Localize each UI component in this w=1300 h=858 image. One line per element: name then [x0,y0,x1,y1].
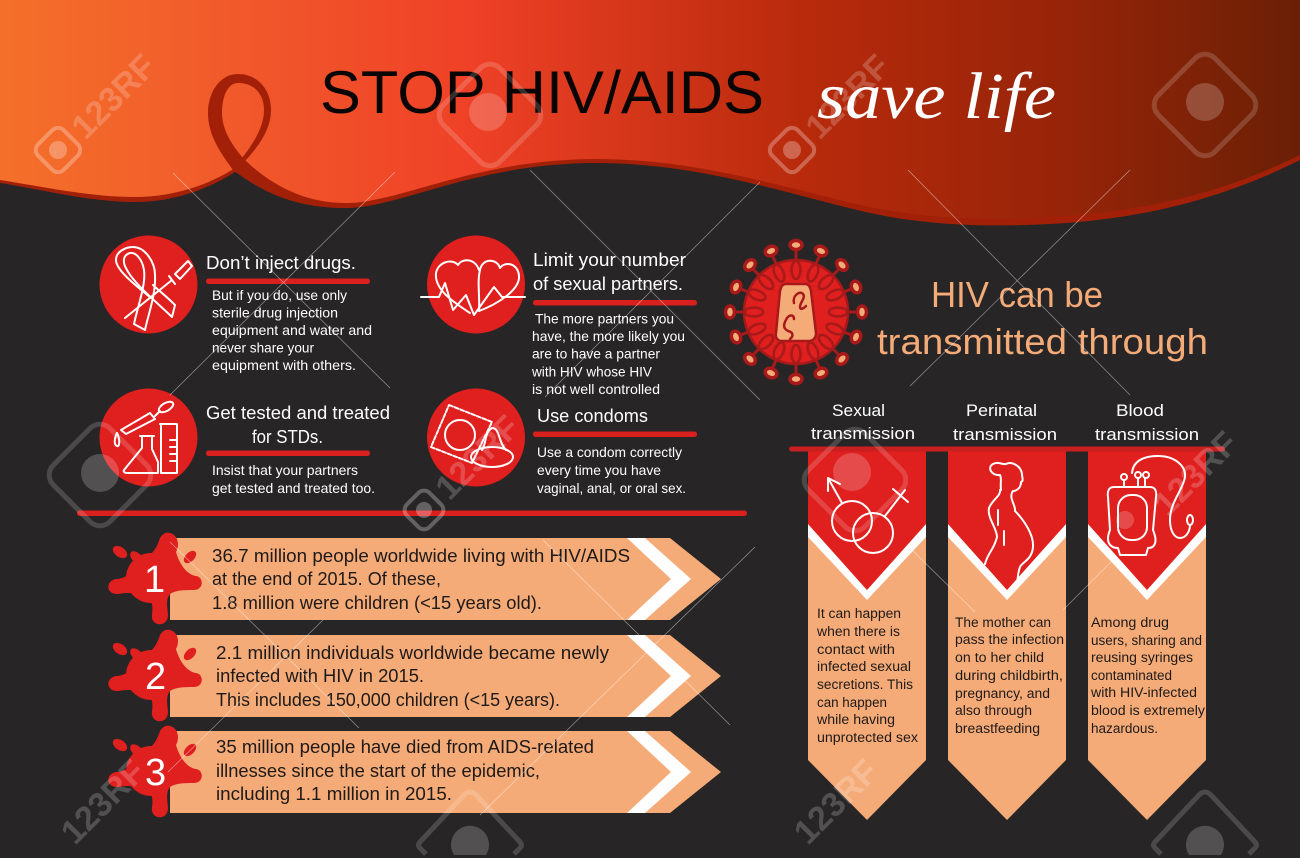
text block: equipment with others. [212,357,356,373]
text block: contact with [817,642,895,657]
heading: Sexual [832,401,885,420]
text block: 2.1 million individuals worldwide became newly [216,643,609,663]
heading [811,401,915,443]
panel: blood transmission [1088,401,1206,820]
text block: Use a condom correctly [537,444,682,460]
icon: gender symbols [828,478,908,553]
panel: don't inject drugs [100,236,372,373]
text block: It can happen [817,606,901,621]
arrow [170,538,721,620]
heading [533,250,686,294]
text block: reusing syringes [1091,650,1193,665]
watermark: 123RF [1147,424,1246,523]
text block: can happen [817,695,887,710]
text block: contaminated [1091,668,1172,683]
panel: sexual transmission [808,401,926,820]
panel: statistic 1 [108,533,721,624]
heading: Perinatal [966,401,1037,420]
text block: This includes 150,000 children (<15 years). [216,690,560,710]
text block: at the end of 2015. Of these, [212,569,441,589]
text block: The more partners you [535,310,674,326]
number: 3 [145,752,166,794]
text block [816,606,918,745]
heading: HIV can be transmitted through: HIV can be [931,274,1103,315]
title: STOP HIV/AIDS [320,59,764,126]
text block [216,643,609,710]
watermark: 123RF [64,47,163,146]
text block: equipment and water and [212,322,372,338]
text block [537,444,686,496]
icon: blood splat [108,533,202,624]
panel: statistic 2 [108,630,721,721]
heading: Limit your number [533,250,686,270]
text block: infected sexual [817,659,911,674]
text block [1090,615,1205,736]
heading: HIV can be transmitted through [877,274,1208,362]
arrow [170,731,721,813]
watermark: 123RF [787,753,886,852]
panel: statistic 3 [108,726,721,817]
heading: for STDs. [252,427,323,447]
heading: Get tested and treated [206,403,390,423]
heading: Use condoms [537,406,648,426]
text block: breastfeeding [955,721,1040,736]
text block [216,737,594,804]
heading: transmission [1095,425,1199,444]
text block: pregnancy, and [955,686,1050,701]
heading: Don’t inject drugs. [206,253,356,273]
text block: sterile drug injection [212,304,338,320]
text block: when there is [816,624,900,639]
text block: Insist that your partners [212,462,358,478]
heading [953,401,1057,444]
text block: with HIV-infected [1090,685,1197,700]
text block: blood is extremely [1091,703,1205,718]
text block: Among drug [1091,615,1169,630]
text block: is not well controlled [532,381,660,397]
text block: secretions. This [817,677,913,692]
text block [212,462,375,496]
icon: hearts and pulse [421,236,525,334]
text block [955,615,1064,736]
panel: limit partners [421,236,697,397]
number: 1 [144,559,165,601]
panel: get tested [100,388,390,496]
text block: 1.8 million were children (<15 years old). [212,593,542,613]
heading [1095,401,1199,444]
text block: 36.7 million people worldwide living with HIV/AIDS [212,546,630,566]
text block: with HIV whose HIV [531,364,653,380]
arrow [170,635,721,717]
heading: transmission [811,424,915,443]
text block: But if you do, use only [212,287,347,303]
text block: never share your [212,340,314,356]
heading: Blood [1116,401,1164,420]
watermark: 123RF [798,47,897,146]
heading: HIV can be transmitted through: transmitted through [877,321,1208,362]
pennant [808,450,926,820]
icon: ribbon and syringe [100,236,198,334]
watermark: 123RF [54,753,153,852]
text block [531,310,685,397]
text block: unprotected sex [817,730,918,745]
text block: 35 million people have died from AIDS-related [216,737,594,757]
text block: infected with HIV in 2015. [216,666,424,686]
text block: have, the more likely you [532,328,685,344]
text block: users, sharing and [1091,633,1202,648]
text block: pass the infection [955,632,1064,647]
text block: on to her child [955,650,1044,665]
text block: including 1.1 million in 2015. [216,784,452,804]
icon: lab equipment [100,388,198,486]
text block: are to have a partner [532,346,660,362]
heading: transmission [953,425,1057,444]
text block: every time you have [537,462,661,478]
number: 2 [145,656,166,698]
pennant [948,450,1066,820]
icon: blood splat [108,630,202,721]
text block: get tested and treated too. [212,480,375,496]
panel: perinatal transmission [948,401,1066,820]
pennant [1088,450,1206,820]
text block: The mother can [955,615,1051,630]
header banner [0,0,1300,225]
icon: blood bag [1108,456,1193,555]
text block: illnesses since the start of the epidemic, [216,761,540,781]
icon: awareness ribbon [208,74,345,208]
text block [212,546,630,613]
icon: virus [726,240,866,384]
icon: pregnant woman [985,463,1033,582]
heading: of sexual partners. [533,274,683,294]
text block: while having [816,712,895,727]
text block: hazardous. [1091,721,1158,736]
watermark: 123RF [428,408,527,507]
text block: also through [955,703,1032,718]
icon: condom [427,388,525,486]
text block: during childbirth, [955,668,1063,683]
text block: vaginal, anal, or oral sex. [537,480,686,496]
panel: use condoms [427,388,697,496]
subtitle: save life [817,60,1056,133]
icon: blood splat [108,726,202,817]
heading [206,403,390,447]
text block [212,287,372,373]
